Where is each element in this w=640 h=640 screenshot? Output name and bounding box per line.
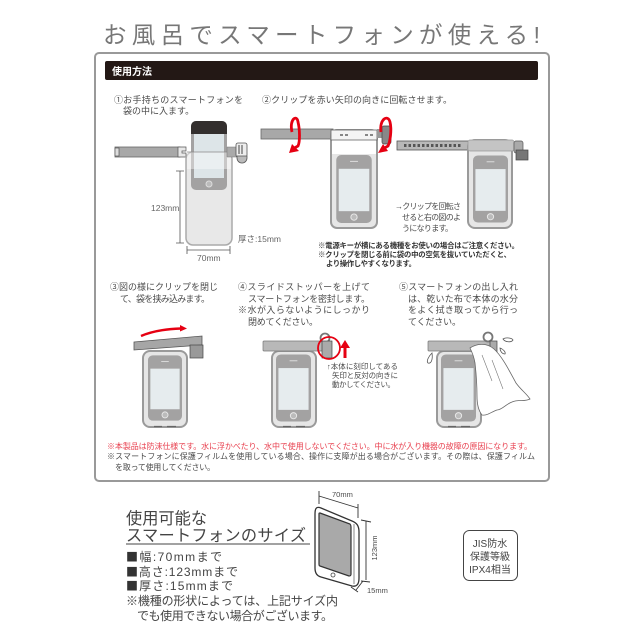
step 2 side note: うになります。 [402,224,453,233]
warning notes: ※本製品は防沫仕様です。水に浮かべたり、水中で使用しないでください。中に水が入り機器の故障の原因になります。 [107,441,532,451]
step 4 side note: 動かしてください。 [332,380,395,389]
step 5 text: てください。 [408,317,461,327]
device size diagram: 70mm [332,490,353,499]
step 1 illustration [115,121,247,245]
icon: cloth [470,344,530,415]
size list: ■高さ:123mmまで [126,563,238,580]
step 3 text: ③図の様にクリップを閉じ [110,281,218,292]
panel: usage instructions [95,53,549,481]
size list: ※機種の形状によっては、上記サイズ内 [126,593,338,608]
icon: water drops [427,338,513,363]
step 4 text: ④スライドストッパーを上げて [238,282,370,292]
badge: JIS waterproof rating: JIS防水 [473,537,507,550]
step 1 text: ①お手持ちのスマートフォンを [114,94,243,105]
step 5 text: をよく拭き取ってから行っ [408,304,518,315]
step 3 illustration [134,325,203,427]
step 2 caution notes [318,241,519,268]
step 4 text: スマートフォンを密封します。 [248,293,370,304]
step 2 illustration: open clip [261,118,391,228]
size list: ■幅:70mmまで [126,548,222,565]
step 2 side note [395,202,461,233]
step 2 side note: せると右の図のよ [402,212,461,222]
step 1 text [114,94,243,116]
step 4 side note: ↑本体に刻印してある [327,361,398,371]
warning notes: ※スマートフォンに保護フィルムを使用している場合、操作に支障が出る場合がございます。その際は、保護フィルム [107,451,535,461]
size list: でも使用できない場合がございます。 [137,608,333,623]
step 2 caution notes: ※クリップを閉じる前に袋の中の空気を抜いていただくと、 [318,250,511,259]
step 4 side note: 矢印と反対の向きに [332,370,398,380]
step 2 caution notes: ※電源キーが横にある機種をお使いの場合はご注意ください。 [318,241,519,250]
size list [126,548,338,623]
step 1 dimensions: 厚さ:15mm [238,234,281,244]
badge: JIS waterproof rating [464,530,518,580]
warning notes [107,441,535,472]
step 1 dimensions: 70mm [197,253,221,263]
step 2 text: ②クリップを赤い矢印の向きに回転させます。 [262,94,452,105]
dimension lines [319,491,371,592]
step 5 text: ⑤スマートフォンの出し入れ [399,281,518,292]
step 5 text: は、乾いた布で本体の水分 [408,293,518,304]
size heading: スマートフォンのサイズ [126,527,306,545]
step 4 illustration [263,334,350,427]
badge: JIS waterproof rating: 保護等級 [470,550,510,563]
panel heading: 使用方法 [112,65,152,78]
step 5 text [399,281,518,327]
step 1 dimensions: 123mm [151,203,179,213]
size list: ■厚さ:15mmまで [126,577,233,594]
title: お風呂でスマートフォンが使える! [103,22,540,48]
step 4 side note [327,361,398,389]
device size diagram: 123mm [370,535,379,561]
badge: JIS waterproof rating: IPX4相当 [469,563,511,576]
panel heading [105,61,538,80]
size heading: 使用可能な [126,510,207,528]
step 1 text: 袋の中に入ます。 [123,105,194,116]
step 4 text: 閉めてください。 [248,317,318,327]
step 2 illustration: rotated clip [397,140,528,228]
step 3 text [110,281,218,304]
step 2 caution notes: より操作しやすくなります。 [326,259,416,268]
size heading [126,510,310,545]
step 1 dimensions [151,171,281,263]
device size diagram: 15mm [367,586,388,595]
device size diagram [315,490,388,595]
step 2 side note: →クリップを回転さ [395,202,461,211]
step 3 text: て、袋を挟み込みます。 [120,293,210,304]
warning notes: を取って使用してください。 [115,462,215,472]
step 4 text [238,282,370,327]
step 4 text: ※水が入らないようにしっかり [238,304,370,315]
step 5 illustration [427,332,530,427]
